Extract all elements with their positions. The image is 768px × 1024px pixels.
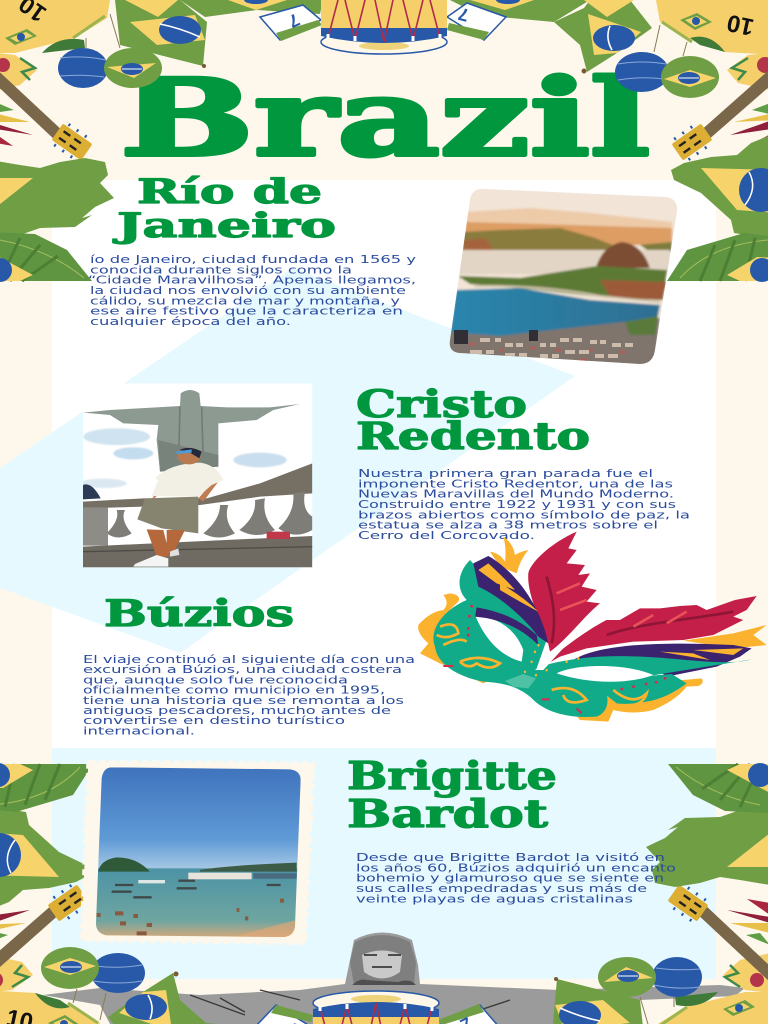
heading: Río de Janeiro: [112, 172, 336, 246]
heading: Cristo Redento: [356, 382, 590, 458]
calendar right: 7: [456, 4, 471, 25]
text block: Cristo Redentor: estatua se alza a 38 metros sobre el: [358, 520, 658, 532]
fan left: [0, 232, 92, 282]
heading: Cristo Redento: Cristo: [356, 382, 527, 426]
map right: [671, 132, 768, 240]
text block: Cristo Redentor: Nuestra primera gran parada fue el: [358, 468, 653, 480]
text block: Río de Janeiro: ío de Janeiro, ciudad fundada en 1565 y: [90, 254, 416, 266]
heading: Brigitte Bardot: Brigitte: [347, 753, 557, 798]
bottom festive decoration: [0, 763, 768, 1024]
text block: Brigitte Bardot: los años 60, Búzios adquirió un encanto: [356, 862, 676, 874]
text block: Brigitte Bardot: [356, 852, 676, 905]
text block: Brigitte Bardot: Desde que Brigitte Bardot la visitó en: [356, 852, 665, 864]
text block: Río de Janeiro: cualquier época del año.: [90, 316, 291, 328]
christ statue bottom: [43, 932, 745, 1024]
title: Brazil: [120, 55, 650, 180]
text block: Brigitte Bardot: bohemio y glamuroso que se siente en: [356, 873, 664, 885]
white content panel: [52, 180, 716, 748]
heading: Río de Janeiro: Río de: [137, 172, 322, 212]
heading: Río de Janeiro: Janeiro: [112, 206, 336, 246]
drum: [321, 0, 447, 54]
text block: Búzios: El viaje continuó al siguiente día con una: [83, 654, 415, 666]
pennant right: [450, 0, 652, 74]
balloons left: [58, 14, 162, 88]
text block: Búzios: antiguos pescadores, mucho antes de: [83, 705, 391, 717]
calendar right: [447, 3, 506, 40]
banner and pennant left: [115, 0, 323, 68]
calendar left: 7: [285, 9, 303, 32]
light blue diagonal shape: [0, 268, 575, 653]
hat right: [656, 0, 768, 55]
heading: Cristo Redento: Redento: [356, 414, 590, 458]
text block: Río de Janeiro: cálido, su mezcla de mar y montaña, y: [90, 295, 400, 307]
top festive decoration: [0, 0, 768, 282]
guitar right: [669, 52, 768, 164]
hat right: 10: [725, 9, 756, 41]
heading: Brigitte Bardot: Bardot: [347, 791, 549, 836]
text block: Búzios: tiene una historia que se remonta a los: [83, 695, 404, 707]
text block: Río de Janeiro: la ciudad nos envolvió con su ambiente: [90, 285, 406, 297]
text block: Cristo Redentor: imponente Cristo Redentor, una de las: [358, 478, 673, 490]
text block: Cristo Redentor: [358, 468, 690, 542]
text block: Búzios: internacional.: [83, 725, 195, 737]
text block: Búzios: convertirse en destino turístico: [83, 715, 345, 727]
feathers right: [730, 100, 768, 145]
photo: Cristo Redentor: [80, 383, 312, 567]
text block: Búzios: [83, 654, 415, 737]
text block: Río de Janeiro: “Cidade Maravilhosa”. Apenas llegamos,: [88, 275, 416, 287]
calendar left: [260, 5, 322, 41]
person: [133, 448, 223, 567]
balloons right: [615, 25, 719, 98]
text block: Río de Janeiro: [88, 254, 416, 328]
photo: Búzios beach in stamp frame: [82, 762, 313, 943]
text block: Brigitte Bardot: sus calles empedradas y sus más de: [356, 883, 647, 895]
text block: Río de Janeiro: conocida durante siglos como la: [90, 264, 352, 276]
text block: Cristo Redentor: Cerro del Corcovado.: [358, 530, 535, 542]
photo: Río de Janeiro bay: [440, 185, 680, 367]
fan right: [667, 233, 768, 282]
map left: [0, 158, 114, 235]
text block: Brigitte Bardot: veinte playas de aguas cristalinas: [356, 893, 633, 905]
text block: Cristo Redentor: Nuevas Maravillas del Mundo Moderno.: [358, 489, 674, 501]
feathers left: [0, 100, 33, 146]
heading: Búzios: Búzios: [104, 593, 294, 635]
text block: Cristo Redentor: Construido entre 1922 y 1931 y con sus: [358, 499, 676, 511]
text block: Búzios: oficialmente como municipio en 1995,: [83, 685, 385, 697]
text block: Búzios: excursión a Búzios, una ciudad costera: [83, 664, 402, 676]
icon: carnival mask: [418, 532, 767, 722]
guitar left: [0, 52, 95, 164]
hat left: [0, 0, 110, 53]
light blue lower panel: [52, 748, 716, 979]
heading: Brigitte Bardot: [347, 753, 557, 836]
text block: Cristo Redentor: brazos abiertos como símbolo de paz, la: [358, 509, 690, 521]
text block: Río de Janeiro: ese aire festivo que la caracteriza en: [90, 306, 403, 318]
text block: Búzios: que, aunque solo fue reconocida: [83, 674, 348, 686]
